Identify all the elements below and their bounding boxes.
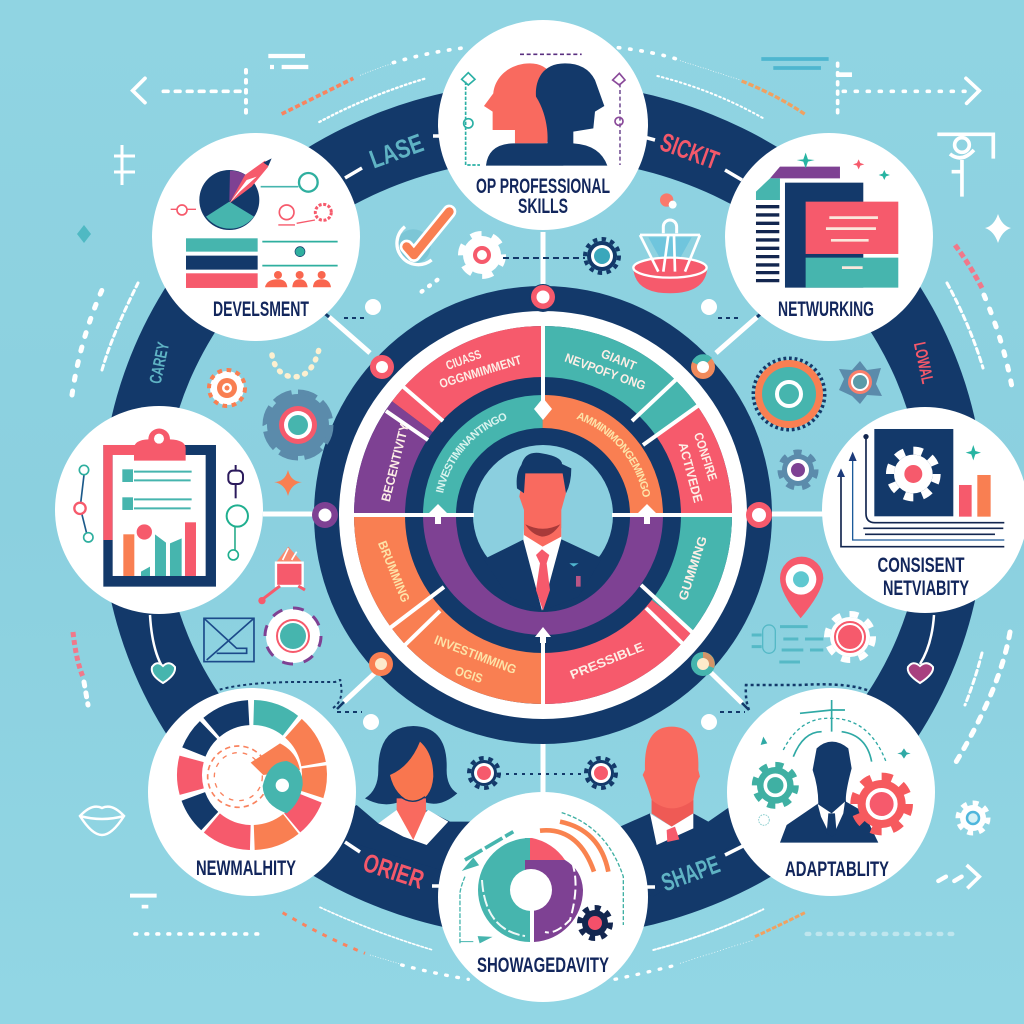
outer navy ring band xyxy=(101,82,985,938)
label: coral bottom: PRESSIBLE xyxy=(568,640,646,682)
label: orange left: BRUMMING xyxy=(375,539,412,605)
circle: networking xyxy=(725,133,933,341)
node upper left xyxy=(370,355,394,379)
inner ring segments xyxy=(440,412,646,618)
label: coral right 2: ACTIVEDE xyxy=(676,441,705,504)
icon: orange gear left xyxy=(209,370,245,406)
inner diamond and arrows xyxy=(534,398,552,420)
icon: steel purple gear xyxy=(780,452,816,488)
icon: check mark xyxy=(396,212,449,292)
icon: dotted arc xyxy=(272,345,320,377)
label: newmality: NEWMALHITY xyxy=(196,857,296,880)
node upper right xyxy=(691,354,715,379)
band label: lase: LASE xyxy=(365,127,427,174)
label: inner orange arc: AMMINIMONGEMINGO xyxy=(576,412,650,497)
teal gear xyxy=(755,765,796,806)
icon: navy gear xyxy=(585,239,619,273)
decorative dotted lines: left side xyxy=(72,290,102,395)
coral gear xyxy=(854,777,909,831)
label: teal top right 2: NEVPOFY ONG xyxy=(563,351,648,393)
node lower right xyxy=(691,652,715,676)
label: coral top left 2: OGGNMIMMENT xyxy=(438,353,523,391)
circle: development xyxy=(152,133,360,341)
shoulders on band xyxy=(343,805,473,880)
icon: white sparkle right xyxy=(985,214,1011,243)
navy bowl under person xyxy=(456,515,630,612)
circle: clipboard xyxy=(55,406,263,614)
label: development: DEVELSMENT xyxy=(213,298,309,321)
label: skills line: SKILLS xyxy=(518,195,568,218)
icon: lips outline lower left xyxy=(80,807,124,835)
label: orange bottom: INVESTIMMING xyxy=(432,633,518,677)
circle: showcase xyxy=(438,792,648,1002)
band label: shape: SHAPE xyxy=(658,850,724,897)
navy figure xyxy=(780,742,878,843)
lapel pin xyxy=(576,576,581,587)
shirt xyxy=(523,528,561,611)
node top xyxy=(529,284,557,312)
mouth xyxy=(525,524,560,537)
segmented donut xyxy=(164,687,340,863)
face and neck xyxy=(519,472,566,547)
icon: white gear lower right xyxy=(959,804,987,832)
icon: crane symbol top right xyxy=(937,134,993,197)
white dots and short dashes near hub xyxy=(363,299,717,730)
people icons xyxy=(265,271,331,287)
label: inner teal arc: INVESTIMINANTINGO xyxy=(436,413,506,493)
label: teal top right: GIANT xyxy=(599,347,638,373)
rising arrow lines xyxy=(866,437,1004,523)
icon: faded list lines xyxy=(752,625,823,662)
stacked bars xyxy=(186,238,258,252)
central hub xyxy=(314,286,772,744)
label: networking: NETWURKING xyxy=(778,298,874,321)
label: adaptability: ADAPTABLITY xyxy=(785,858,889,881)
label: coral right: CONFIRE xyxy=(691,431,720,483)
decorative dotted lines: bottom xyxy=(130,896,468,979)
centre disc xyxy=(473,445,613,585)
icon: white and purple gear xyxy=(265,608,321,664)
icon: steel star gear xyxy=(839,361,882,404)
tie xyxy=(536,549,550,611)
person: man xyxy=(620,727,740,897)
label: purple left: BECENTIVITY xyxy=(379,422,412,503)
icon: heart with line left xyxy=(150,615,175,683)
circle: adaptability xyxy=(727,688,935,896)
icon: navy gear lower right xyxy=(586,758,616,788)
circle: newmality xyxy=(148,687,356,896)
side nodes xyxy=(81,475,87,533)
label: coral top left: CIUASS xyxy=(444,347,483,373)
icon: navy gear with coral core xyxy=(580,908,610,938)
circle: professional skills xyxy=(438,20,648,230)
hair xyxy=(517,453,571,493)
orange arcs xyxy=(540,822,608,872)
icon: white gear with dashed link xyxy=(461,234,503,276)
person xyxy=(484,453,602,611)
icon: heart with line right xyxy=(908,615,934,683)
node lower left xyxy=(369,652,393,676)
teal arcs and arrows xyxy=(460,832,513,943)
outer wedges xyxy=(313,285,773,745)
person: woman xyxy=(343,726,473,880)
icon: navy head xyxy=(520,54,625,166)
icon: big orange gear xyxy=(754,359,824,429)
label: professional skills: OP PROFESSIONAL xyxy=(476,175,610,198)
icon: steel gear xyxy=(265,392,331,458)
band label: lowal: LOWAL xyxy=(910,340,937,385)
decorative dotted lines: top left xyxy=(133,47,468,122)
icon: navy gear lower left xyxy=(469,758,499,788)
wedge labels xyxy=(335,314,760,718)
node left xyxy=(312,502,338,528)
connector lines from hub to nodes xyxy=(263,232,823,793)
icon: coral box xyxy=(258,547,305,604)
icon: orange sparkle xyxy=(274,470,302,496)
wedge dividers xyxy=(354,326,732,704)
icon: white coral gear xyxy=(827,614,873,660)
icon: map pin xyxy=(780,557,823,618)
label: consistent: CONSISENT xyxy=(878,554,965,577)
left dashed markers xyxy=(462,73,480,165)
icon: basket xyxy=(633,193,707,293)
icon: envelope xyxy=(204,618,254,662)
ring nodes xyxy=(312,284,772,676)
node right xyxy=(746,502,772,528)
label: orange bottom 2: OGIS xyxy=(453,664,484,686)
suit xyxy=(484,539,602,611)
decorative dotted lines: right side xyxy=(955,245,982,288)
label: teal right: GUMMING xyxy=(676,534,710,602)
band label: orier: ORIER xyxy=(360,847,428,895)
icon: coral head xyxy=(484,63,563,166)
label: netviabity: NETVIABITY xyxy=(883,577,969,600)
decorative dotted lines: top right xyxy=(618,48,979,118)
band label: sickit: SICKIT xyxy=(656,127,723,175)
band label: carey: CAREY xyxy=(146,340,173,385)
pie chart xyxy=(199,158,272,230)
dashed arcs above head xyxy=(793,732,872,762)
band labels xyxy=(146,127,937,897)
shoulders on band xyxy=(620,807,740,897)
donut chart xyxy=(478,838,583,942)
circle: consistent reliability xyxy=(822,407,1024,613)
label: showcase: SHOWAGEDAVITY xyxy=(477,954,609,977)
